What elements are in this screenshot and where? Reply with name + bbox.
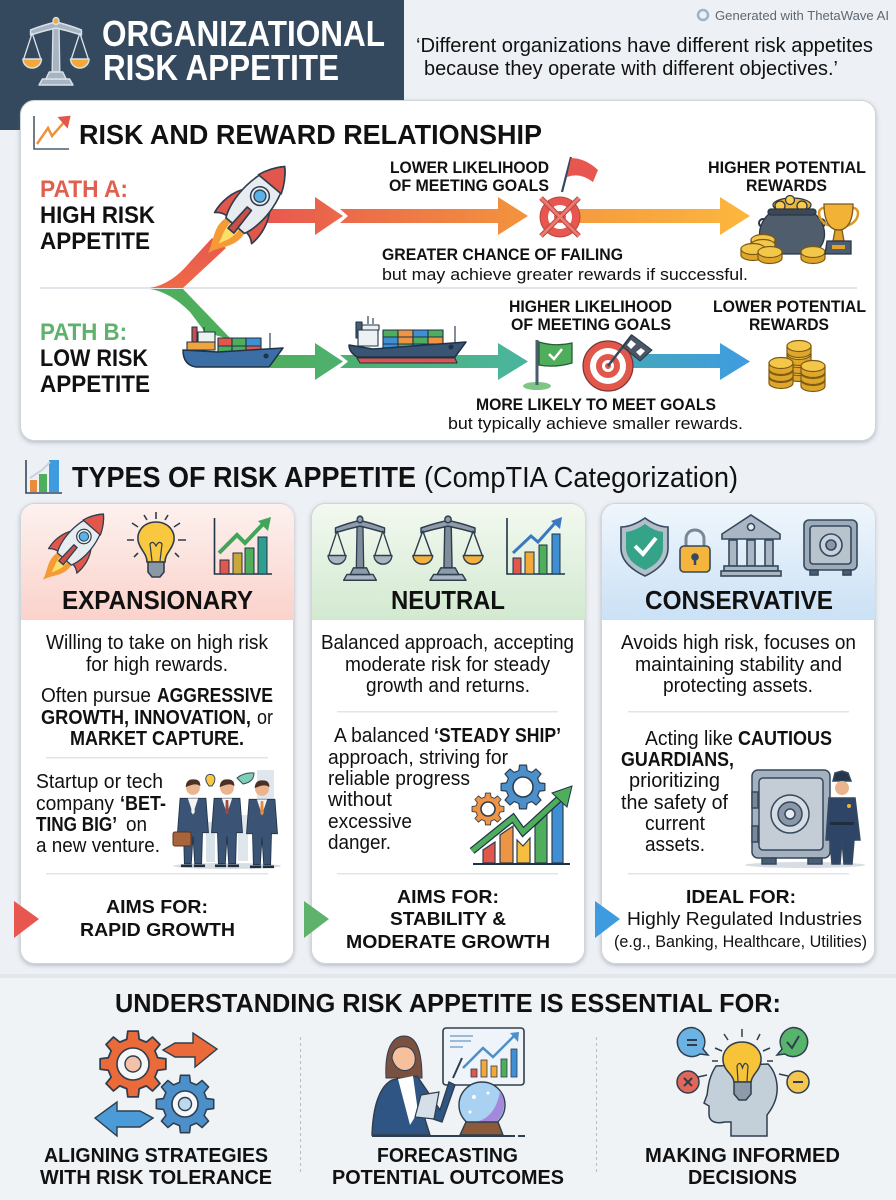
ideal-for text (614, 886, 867, 951)
steady ship text: reliable progress (328, 768, 470, 790)
title (102, 13, 385, 88)
icon: balance scale grey (328, 516, 392, 580)
path B label (40, 319, 150, 398)
description (46, 632, 269, 676)
path A label: PATH A: (40, 176, 128, 203)
caption: greater chance of failing (382, 245, 748, 284)
header quote: ‘Different organizations have different risk appetites (416, 35, 873, 57)
ideal-for text: IDEAL FOR: (686, 886, 796, 907)
example text: company (36, 793, 114, 815)
label: forecasting (332, 1145, 564, 1189)
steady ship text: without (327, 789, 392, 811)
label: higher likelihood: HIGHER LIKELIHOOD (509, 297, 672, 316)
icon: pot of gold (741, 196, 825, 264)
label: lower potential rewards: LOWER POTENTIAL (713, 297, 866, 316)
icon: trophy (819, 204, 858, 254)
strategy text: or (257, 707, 273, 729)
path A label: HIGH RISK (40, 202, 156, 229)
caption: more likely to meet goals (448, 395, 743, 433)
divider (40, 287, 857, 289)
description: Willing to take on high risk (46, 632, 269, 654)
column dividers (300, 1037, 596, 1173)
description: moderate risk for steady (345, 654, 550, 676)
card title: EXPANSIONARY (62, 585, 253, 615)
title: ORGANIZATIONAL (102, 13, 385, 54)
caption: greater chance of failing: but may achieve greater rewards if successful. (382, 265, 748, 284)
aim text: AIMS FOR: (106, 896, 208, 917)
icon: gears and arrows (95, 1031, 217, 1136)
label: lower potential rewards (713, 297, 866, 334)
steady ship text: excessive (328, 811, 412, 833)
label: lower likelihood (389, 158, 549, 195)
icon: target with checkered flag (583, 335, 652, 391)
steady ship text: danger. (328, 832, 391, 854)
path B label: APPETITE (40, 371, 150, 398)
description: for high rewards. (86, 654, 228, 676)
path A label: APPETITE (40, 228, 150, 255)
ideal-for text: Highly Regulated Industries (627, 908, 862, 929)
label: aligning strategies: ALIGNING STRATEGIES (44, 1145, 268, 1167)
heading: risk and reward relationship: RISK AND REWARD RELATIONSHIP (79, 119, 542, 150)
strategy text: AGGRESSIVE (157, 685, 273, 707)
icon: large cargo ship (349, 316, 466, 363)
guardian text: prioritizing (629, 770, 720, 792)
description: Balanced approach, accepting (321, 632, 574, 654)
green pointer (304, 901, 329, 938)
path B label: PATH B: (40, 319, 127, 346)
label: lower potential rewards: REWARDS (749, 315, 829, 334)
panel: risk and reward relationship (20, 100, 876, 440)
path B label: LOW RISK (40, 345, 149, 372)
icon: red flag (562, 157, 598, 192)
description: growth and returns. (366, 675, 530, 697)
caption: greater chance of failing: GREATER CHANCE OF FAILING (382, 245, 623, 264)
lower band background (0, 978, 896, 1200)
icon: balance scale orange (413, 516, 483, 580)
aim text (80, 896, 235, 940)
label: forecasting: POTENTIAL OUTCOMES (332, 1167, 564, 1189)
aim text (346, 886, 550, 952)
example text (36, 771, 166, 857)
icon: rising trend chart (34, 116, 69, 149)
description (621, 632, 856, 697)
heading: types of risk appetite (72, 462, 738, 494)
description: protecting assets. (663, 675, 813, 697)
icon: coin stacks (769, 340, 825, 392)
label: making informed decisions: DECISIONS (688, 1167, 797, 1189)
guardian text: current (645, 813, 705, 835)
label: higher potential rewards: HIGHER POTENTIAL (708, 158, 866, 177)
label: aligning strategies (40, 1145, 272, 1189)
strategy text: GROWTH, INNOVATION, (41, 707, 251, 729)
panel: expansionary (14, 501, 294, 964)
icon: safe (804, 520, 857, 575)
icon: shield (621, 518, 668, 576)
heading: types of risk appetite: TYPES OF RISK APPETITE (72, 462, 416, 494)
aim text: STABILITY & (390, 908, 506, 929)
guardian text: assets. (645, 834, 705, 856)
label: higher potential rewards (708, 158, 866, 195)
card title: NEUTRAL (391, 585, 505, 615)
example text: a new venture. (36, 835, 160, 857)
icon: green flag (523, 340, 572, 390)
label: making informed decisions: MAKING INFORMED (645, 1145, 840, 1167)
title: RISK APPETITE (103, 47, 339, 88)
path A label (40, 176, 156, 255)
icon: growth chart (214, 517, 272, 574)
icon: bank building (721, 515, 781, 576)
steady ship text (327, 725, 561, 854)
guardian text: CAUTIOUS (738, 728, 832, 750)
heading: types of risk appetite: (CompTIA Categorization) (424, 462, 738, 494)
guardian text: GUARDIANS, (621, 749, 734, 771)
aim text: RAPID GROWTH (80, 919, 235, 940)
icon: head with light bulb and options (677, 1027, 809, 1136)
arrow path B (150, 289, 750, 380)
icon: rocket (191, 151, 304, 271)
description: maintaining stability and (635, 654, 842, 676)
icon: rocket (30, 501, 118, 594)
steady ship text: ‘STEADY SHIP’ (434, 725, 561, 747)
label: lower likelihood: LOWER LIKELIHOOD (390, 158, 549, 177)
arrow path A (150, 197, 750, 288)
panel: conservative (595, 504, 875, 964)
label: lower likelihood: OF MEETING GOALS (389, 176, 549, 195)
label: aligning strategies: WITH RISK TOLERANCE (40, 1167, 272, 1189)
strategy text (41, 685, 273, 750)
red pointer (14, 901, 39, 938)
heading: understanding risk appetite: UNDERSTANDING RISK APPETITE IS ESSENTIAL FOR: (115, 988, 781, 1018)
description (321, 632, 574, 697)
header quote (416, 35, 873, 80)
example text: on (126, 814, 147, 836)
illustration: three businesspeople (173, 770, 281, 869)
example text: Startup or tech (36, 771, 163, 793)
header quote: because they operate with different objectives.’ (424, 58, 838, 80)
label: higher potential rewards: REWARDS (746, 176, 827, 195)
icon: light bulb (127, 512, 186, 577)
label: forecasting: FORECASTING (377, 1145, 518, 1167)
aim text: MODERATE GROWTH (346, 931, 550, 952)
guardian text: Acting like (645, 728, 733, 750)
guardian text (621, 728, 832, 856)
steady ship text: A balanced (334, 725, 429, 747)
icon: growth chart (507, 517, 565, 574)
illustration: gears and growth arrow (472, 765, 572, 864)
example text: ‘BET- (120, 793, 166, 815)
blue pointer (595, 901, 620, 938)
icon: padlock (680, 530, 710, 572)
example text: TING BIG’ (36, 814, 117, 836)
header: dark title block (0, 0, 404, 130)
aim text: AIMS FOR: (397, 886, 499, 907)
caption: more likely to meet goals: but typically achieve smaller rewards. (448, 414, 743, 433)
icon: small cargo ship (183, 327, 283, 367)
icon: forecaster with chart and crystal ball (372, 1028, 525, 1136)
card title: CONSERVATIVE (645, 585, 833, 615)
strategy text: MARKET CAPTURE. (70, 728, 244, 750)
watermark: Generated with ThetaWave AI (715, 8, 889, 23)
illustration: safe and guard (745, 770, 865, 868)
label: higher likelihood (509, 297, 672, 334)
label: making informed decisions (645, 1145, 840, 1189)
guardian text: the safety of (621, 792, 728, 814)
icon: bar chart heading (26, 460, 62, 493)
strategy text: Often pursue (41, 685, 151, 707)
icon: crossed-out target (540, 197, 580, 237)
steady ship text: approach, striving for (328, 747, 508, 769)
panel: neutral (304, 504, 585, 964)
label: higher likelihood: OF MEETING GOALS (511, 315, 671, 334)
ideal-for text: (e.g., Banking, Healthcare, Utilities) (614, 932, 867, 951)
icon: balance scale (23, 18, 89, 85)
caption: more likely to meet goals: MORE LIKELY TO MEET GOALS (476, 395, 716, 414)
description: Avoids high risk, focuses on (621, 632, 856, 654)
